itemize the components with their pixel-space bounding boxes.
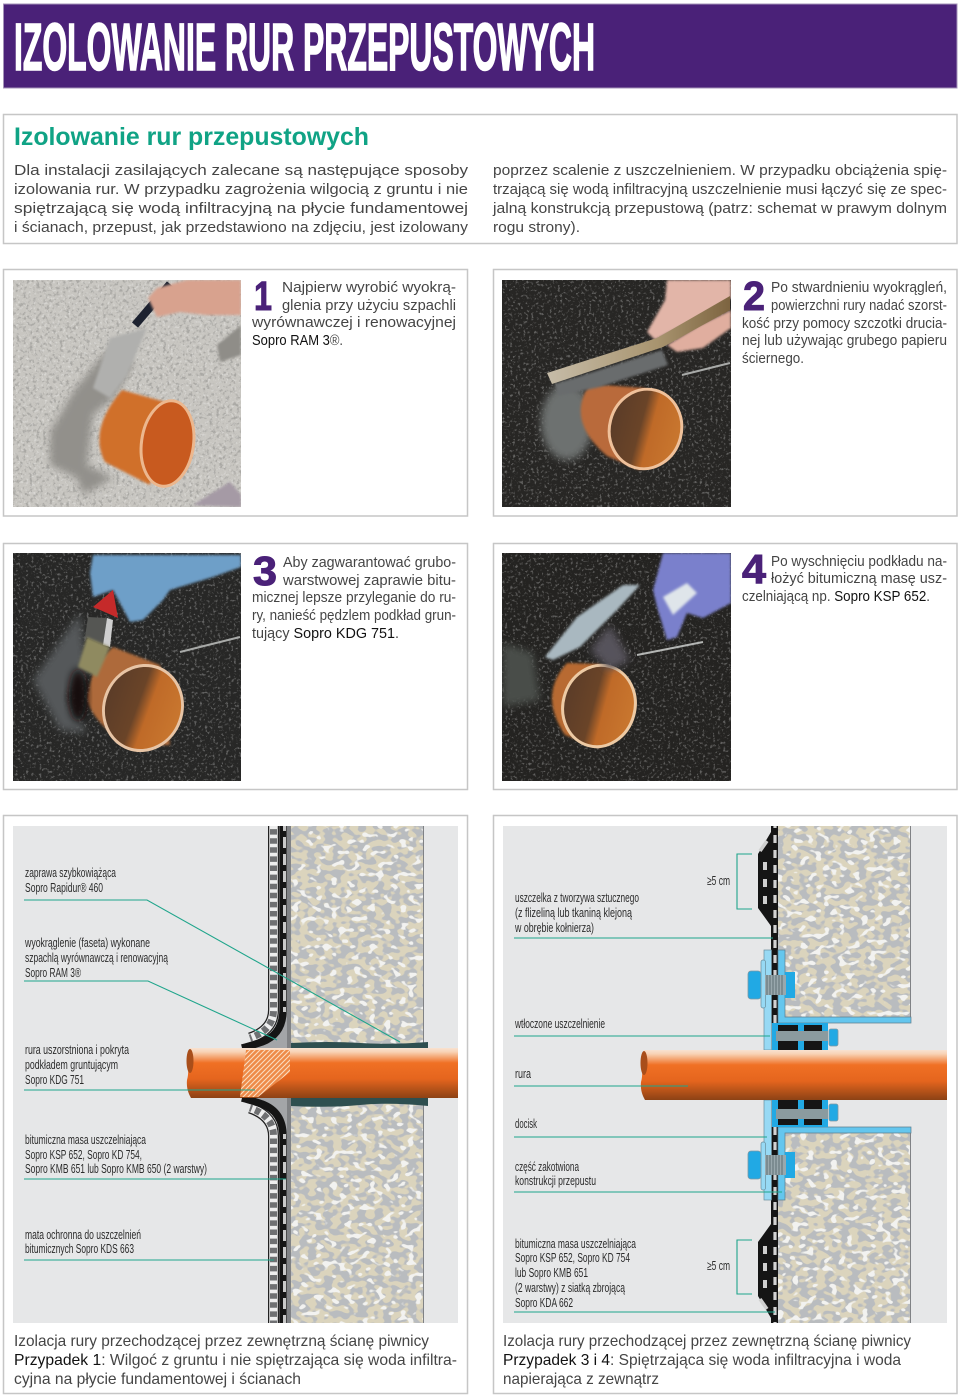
step text xyxy=(252,555,456,642)
labels xyxy=(24,865,207,1256)
concrete wall xyxy=(287,826,424,1323)
step text: micznej lepsze przyleganie do ru- xyxy=(252,590,456,606)
dimension bracket: upper xyxy=(707,854,752,909)
caption: cyjna na płycie fundamentowej i ścianach xyxy=(14,1371,301,1388)
text block: left column: spiętrzającą się wodą infiltracyjną na płycie fundamentowej xyxy=(14,200,468,217)
step text: Sopro RAM 3®. xyxy=(252,333,343,349)
pipe xyxy=(640,1050,947,1100)
panel: diagram case 1 xyxy=(4,816,468,1394)
text block: right column: jalną konstrukcją przepustową (patrz: schemat w prawym dolnym xyxy=(492,200,947,217)
text block: right column: trzającą się wodą infiltracyjną uszczelnienie musi łączyć się ze spec- xyxy=(493,181,947,198)
photo: roughening the pipe with a wire brush xyxy=(502,280,731,507)
labels: Sopro KSP 652, Sopro KD 754 xyxy=(515,1250,630,1265)
labels: docisk xyxy=(515,1116,537,1131)
labels: (2 warstwy) z siatką zbrojącą xyxy=(515,1280,626,1295)
photo: applying bitumen sealing compound xyxy=(502,553,731,781)
photo: priming the pipe with a brush xyxy=(13,553,241,781)
labels: Sopro Rapidur® 460 xyxy=(25,880,103,895)
step text: wyrównawczej i renowacyjnej xyxy=(251,315,456,331)
text block: left column: i ścianach, przepust, jak przedstawiono na zdjęciu, jest izolowany xyxy=(14,219,469,236)
sealing layers: upper xyxy=(242,820,287,1048)
panel: step 2 xyxy=(494,270,957,516)
step number: 3 xyxy=(253,548,277,594)
sealing layers: lower xyxy=(242,1098,287,1326)
dimension bracket: lower xyxy=(707,1240,752,1294)
step number: 4 xyxy=(742,546,766,592)
step text: Po stwardnieniu wyokrągleń, xyxy=(771,280,947,296)
heading: Izolowanie rur przepustowych xyxy=(14,123,369,151)
concrete wall xyxy=(778,826,911,1323)
panel: diagram case 3 and 4 xyxy=(494,816,957,1394)
panel: step 3 xyxy=(4,544,468,790)
dimension bracket: upper: ≥5 cm xyxy=(707,873,730,888)
labels: rura xyxy=(515,1066,532,1081)
step text xyxy=(742,280,947,367)
labels: podkładem gruntującym xyxy=(25,1057,118,1072)
labels: wyokrąglenie (faseta) wykonane xyxy=(24,935,150,950)
step text: kość przy pomocy szczotki drucia- xyxy=(742,316,947,332)
labels xyxy=(514,890,639,1310)
panel: step 4 xyxy=(494,544,957,790)
step text: ry, nanieść pędzlem podkład grun- xyxy=(252,608,456,624)
labels: bitumiczna masa uszczelniająca xyxy=(25,1132,146,1147)
mortar band around pipe xyxy=(291,1042,428,1107)
step text: glenia przy użyciu szpachli xyxy=(282,298,456,314)
step number: 2 xyxy=(743,273,765,319)
labels: rura uszorstniona i pokryta xyxy=(25,1042,130,1057)
labels: (z flizeliną lub tkaniną klejoną xyxy=(515,905,633,920)
labels: bitumiczna masa uszczelniająca xyxy=(515,1236,636,1251)
labels: szpachlą wyrównawczą i renowacyjną xyxy=(25,950,168,965)
step text: łożyć bitumiczną masę usz- xyxy=(771,571,947,587)
labels: zaprawa szybkowiążąca xyxy=(25,865,116,880)
step text xyxy=(742,554,947,605)
step number: 1 xyxy=(254,273,272,319)
text block: left column: Dla instalacji zasilających zalecane są następujące sposoby xyxy=(14,162,469,179)
labels: Sopro KSP 652, Sopro KD 754, xyxy=(25,1147,142,1162)
caption xyxy=(503,1333,911,1388)
labels: uszczelka z tworzywa sztucznego xyxy=(515,890,639,905)
labels: wtłoczone uszczelnienie xyxy=(514,1016,605,1031)
diagram: pipe through wall with flange, case 3 and 4 xyxy=(503,820,947,1330)
labels: Sopro KDA 662 xyxy=(515,1295,573,1310)
caption: Przypadek 1: Wilgoć z gruntu i nie spiętrzająca się woda infiltra- xyxy=(14,1352,457,1369)
flange and seal: upper xyxy=(748,820,911,1050)
panel: step 1 xyxy=(4,270,468,516)
labels: część zakotwiona xyxy=(515,1159,579,1174)
caption: napierająca z zewnątrz xyxy=(503,1371,659,1388)
step text: czelniającą np. Sopro KSP 652. xyxy=(742,589,930,605)
labels: konstrukcji przepustu xyxy=(515,1173,596,1188)
step text: Najpierw wyrobić wyokrą- xyxy=(282,280,456,296)
labels: Sopro KMB 651 lub Sopro KMB 650 (2 warstwy) xyxy=(25,1161,207,1176)
labels: lub Sopro KMB 651 xyxy=(515,1265,588,1280)
step text: nej lub używając grubego papieru xyxy=(742,333,947,349)
labels: bitumicznych Sopro KDS 663 xyxy=(25,1241,134,1256)
text block: left column: izolowania rur. W przypadku zagrożenia wilgocią z gruntu i nie xyxy=(14,181,468,198)
panel: introduction xyxy=(4,114,957,244)
step text: warstwowej zaprawie bitu- xyxy=(282,573,456,589)
caption: Przypadek 3 i 4: Spiętrzająca się woda infiltracyjna i woda xyxy=(503,1352,901,1369)
step text: tujący Sopro KDG 751. xyxy=(252,626,399,642)
leader lines xyxy=(24,900,400,1260)
step text: ściernego. xyxy=(742,351,804,367)
step text: Aby zagwarantować grubo- xyxy=(283,555,456,571)
labels: Sopro KDG 751 xyxy=(25,1072,84,1087)
step text xyxy=(251,280,456,349)
pipe xyxy=(186,1048,458,1098)
text block: right column xyxy=(492,162,947,236)
photo: applying levelling compound around the pipe xyxy=(13,280,241,507)
labels: Sopro RAM 3® xyxy=(25,965,81,980)
diagram: pipe through wall, case 1 xyxy=(13,820,458,1326)
text block: right column: rogu strony). xyxy=(493,219,580,236)
text block: right column: poprzez scalenie z uszczelnieniem. W przypadku obciążenia spię- xyxy=(493,162,947,179)
dimension bracket: lower: ≥5 cm xyxy=(707,1258,730,1273)
caption: Izolacja rury przechodzącej przez zewnętrzną ścianę piwnicy xyxy=(14,1333,429,1350)
caption xyxy=(14,1333,457,1388)
caption: Izolacja rury przechodzącej przez zewnętrzną ścianę piwnicy xyxy=(503,1333,911,1350)
labels: w obrębie kołnierza) xyxy=(514,920,594,935)
leader lines xyxy=(514,938,782,1312)
step text: Po wyschnięciu podkładu na- xyxy=(771,554,947,570)
text block: left column xyxy=(14,162,469,236)
labels: mata ochronna do uszczelnień xyxy=(25,1227,141,1242)
flange and seal: lower xyxy=(748,1100,911,1330)
